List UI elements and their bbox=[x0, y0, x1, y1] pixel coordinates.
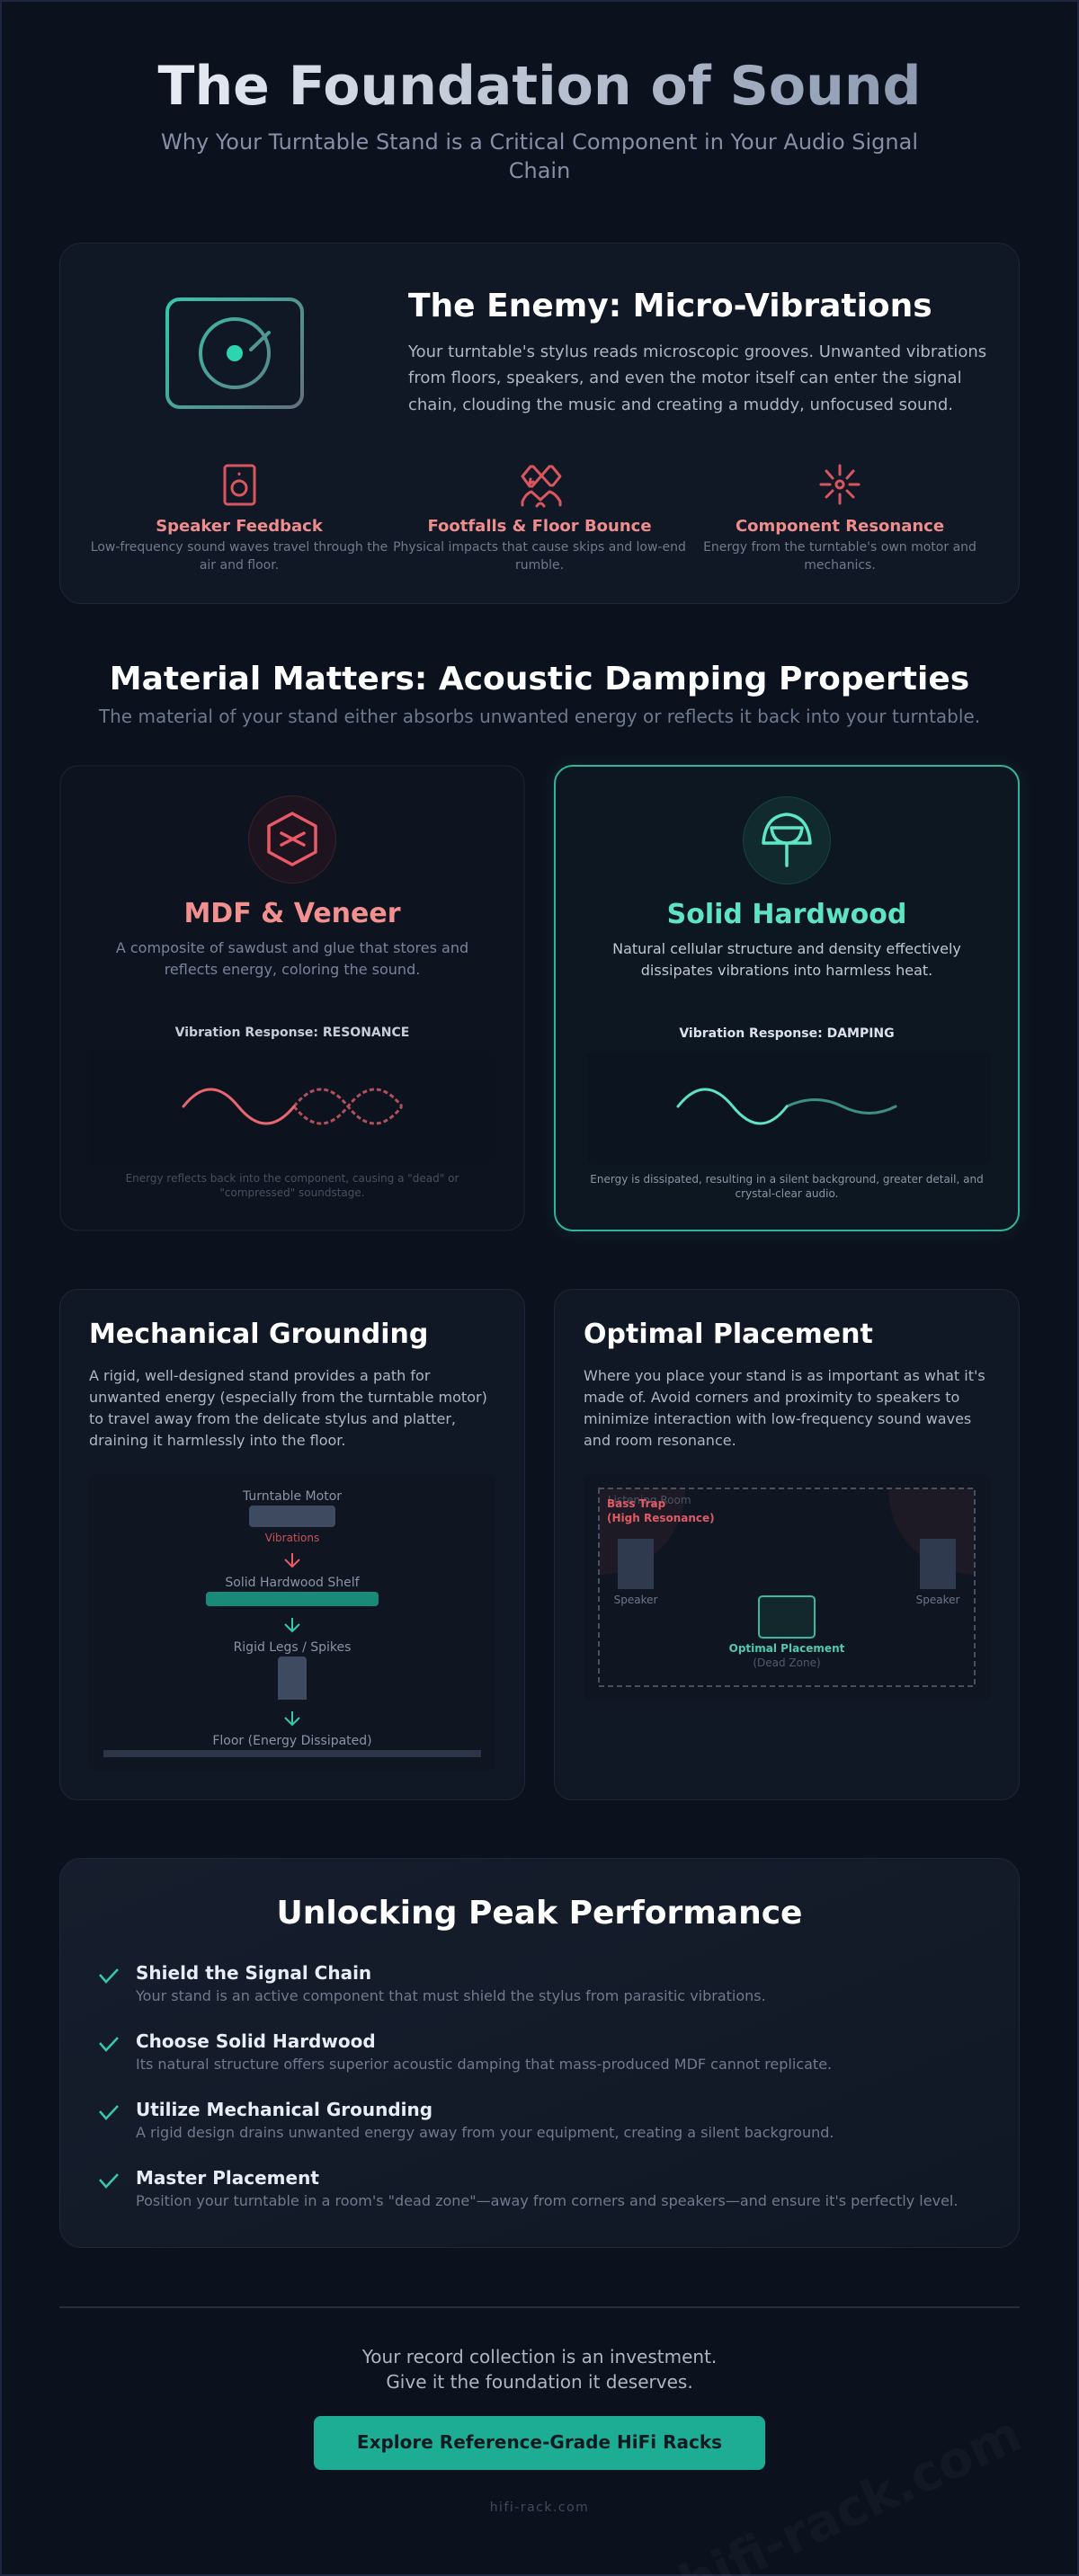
item: placement: Position your turntable in a room's "dead zone"—away from corners and speakers—and ensure it's perfectly level. bbox=[136, 2192, 958, 2209]
item: footfalls: Footfalls & Floor Bounce bbox=[427, 517, 652, 536]
heading: mechanical grounding: Mechanical Grounding bbox=[89, 1319, 428, 1350]
text: site url: hifi-rack.com bbox=[490, 2500, 589, 2515]
item: placement bbox=[100, 2167, 958, 2209]
item: placement: Master Placement bbox=[136, 2167, 319, 2189]
button: explore racks bbox=[314, 2416, 765, 2470]
item: hardwood: Its natural structure offers superior acoustic damping that mass-produced MDF cannot replicate. bbox=[136, 2056, 832, 2073]
heading: unlocking: Unlocking Peak Performance bbox=[277, 1895, 802, 1932]
text: grounding description: to travel away from the delicate stylus and platter, bbox=[89, 1410, 456, 1427]
label: listening room: Listening Room bbox=[608, 1494, 691, 1506]
label: legs: Rigid Legs / Spikes bbox=[234, 1640, 351, 1655]
item: hardwood: Choose Solid Hardwood bbox=[136, 2030, 376, 2052]
label: speaker left: Speaker bbox=[614, 1594, 657, 1606]
text: hardwood description: dissipates vibrations into harmless heat. bbox=[641, 962, 932, 979]
label: dead zone: (Dead Zone) bbox=[753, 1657, 821, 1669]
zones: bass traps bbox=[599, 1488, 975, 1575]
label: optimal placement: Optimal Placement bbox=[729, 1642, 845, 1655]
heading: hardwood: Solid Hardwood bbox=[667, 899, 906, 930]
icon: turntable bbox=[167, 299, 302, 407]
speaker right bbox=[920, 1539, 956, 1589]
caption: mdf: "compressed" soundstage. bbox=[219, 1186, 365, 1199]
caption: hardwood: Energy is dissipated, resulting in a silent background, greater detail, and bbox=[590, 1173, 984, 1186]
chart: resonance wave bbox=[88, 1051, 496, 1165]
label: turntable motor: Turntable Motor bbox=[242, 1489, 342, 1504]
text: enemy description: Your turntable's stylus reads microscopic grooves. Unwanted vibrations bbox=[407, 342, 986, 361]
text: call to action bbox=[361, 2346, 717, 2393]
item: footfalls: rumble. bbox=[515, 558, 564, 573]
block: motor bbox=[249, 1506, 335, 1527]
item: component resonance: Component Resonance bbox=[736, 517, 944, 536]
text: hardwood description bbox=[612, 940, 961, 979]
diagram: room layout bbox=[598, 1488, 976, 1687]
item: shield bbox=[100, 1962, 766, 2004]
item: footfalls bbox=[393, 517, 686, 573]
label: shelf: Solid Hardwood Shelf bbox=[225, 1576, 361, 1590]
text: mdf description bbox=[116, 939, 468, 978]
item: grounding: A rigid design drains unwanted energy away from your equipment, creating a silent background. bbox=[136, 2124, 834, 2141]
label: floor: Floor (Energy Dissipated) bbox=[212, 1734, 372, 1748]
item: speaker feedback: Low-frequency sound waves travel through the bbox=[91, 540, 388, 555]
block: floor bbox=[103, 1750, 481, 1757]
item: grounding bbox=[100, 2099, 834, 2141]
chart: damping wave bbox=[587, 1051, 990, 1165]
title: The Foundation of Sound bbox=[158, 55, 921, 118]
label: bass trap: (High Resonance) bbox=[607, 1512, 715, 1524]
panel: unlocking peak performance bbox=[59, 1859, 1020, 2247]
heading: the enemy: The Enemy: Micro-Vibrations bbox=[408, 288, 932, 324]
heading: mdf: MDF & Veneer bbox=[183, 898, 401, 929]
label: speaker right: Speaker bbox=[916, 1594, 959, 1606]
turntable position bbox=[759, 1596, 815, 1638]
item: shield: Shield the Signal Chain bbox=[136, 1962, 371, 1984]
icon: footfalls bbox=[522, 466, 560, 506]
arrow: shelf to legs bbox=[285, 1618, 299, 1631]
item: speaker feedback: Speaker Feedback bbox=[156, 517, 324, 536]
panel: optimal placement bbox=[554, 1289, 1020, 1800]
panel: the enemy micro-vibrations bbox=[59, 243, 1020, 604]
caption: hardwood bbox=[590, 1173, 984, 1200]
icon: resonance bbox=[821, 466, 859, 503]
item: footfalls: Physical impacts that cause skips and low-end bbox=[393, 540, 686, 555]
caption: hardwood: crystal-clear audio. bbox=[736, 1187, 838, 1200]
text: grounding description: unwanted energy (especially from the turntable motor) bbox=[89, 1389, 487, 1406]
text: placement description: minimize interaction with low-frequency sound waves bbox=[584, 1410, 971, 1427]
item: speaker feedback bbox=[91, 517, 388, 573]
subtitle: Why Your Turntable Stand is a Critical Component in Your Audio Signal bbox=[161, 129, 918, 155]
label: resonance: Vibration Response: RESONANCE bbox=[175, 1026, 409, 1040]
label: bass trap bbox=[607, 1497, 715, 1524]
panel: mdf and veneer bbox=[60, 766, 524, 1230]
arrow: legs to floor bbox=[285, 1711, 299, 1725]
text: placement description: Where you place your stand is as important as what it's bbox=[584, 1367, 985, 1384]
button: explore racks: Explore Reference-Grade HiFi Racks bbox=[357, 2431, 722, 2453]
item: hardwood bbox=[100, 2030, 832, 2073]
panel: solid hardwood bbox=[555, 766, 1019, 1230]
subtitle: Chain bbox=[509, 158, 570, 183]
heading: optimal placement: Optimal Placement bbox=[584, 1319, 873, 1350]
text: enemy description: from floors, speakers, and even the motor itself can enter the signal bbox=[408, 369, 962, 387]
block: shelf bbox=[206, 1592, 379, 1606]
label: vibrations: Vibrations bbox=[265, 1532, 319, 1544]
text: placement description bbox=[584, 1367, 985, 1449]
icon: hardwood bbox=[743, 796, 831, 884]
text: grounding description: draining it harmlessly into the floor. bbox=[89, 1432, 345, 1449]
speaker left bbox=[618, 1539, 654, 1589]
item: component resonance: mechanics. bbox=[804, 558, 876, 573]
item: component resonance bbox=[703, 517, 976, 573]
subtitle bbox=[161, 129, 918, 183]
text: call to action: Your record collection is an investment. bbox=[361, 2346, 717, 2367]
item: speaker feedback: air and floor. bbox=[200, 558, 279, 573]
item: grounding: Utilize Mechanical Grounding bbox=[136, 2099, 432, 2120]
text: material subtitle: The material of your stand either absorbs unwanted energy or reflects it back into your turntable. bbox=[98, 706, 980, 727]
label: damping: Vibration Response: DAMPING bbox=[679, 1026, 895, 1041]
heading: material matters: Material Matters: Acoustic Damping Properties bbox=[110, 661, 969, 697]
item: shield: Your stand is an active component that must shield the stylus from parasitic vibrations. bbox=[135, 1987, 766, 2004]
text: mdf description: A composite of sawdust and glue that stores and bbox=[116, 939, 468, 956]
room outline bbox=[599, 1488, 975, 1686]
text: grounding description: A rigid, well-designed stand provides a path for bbox=[89, 1367, 431, 1384]
text: call to action: Give it the foundation it deserves. bbox=[386, 2371, 693, 2393]
text: enemy description: chain, clouding the music and creating a muddy, unfocused sound. bbox=[408, 395, 953, 414]
caption: mdf: Energy reflects back into the component, causing a "dead" or bbox=[126, 1172, 459, 1185]
text: placement description: made of. Avoid corners and proximity to speakers to bbox=[584, 1389, 959, 1406]
block: leg bbox=[278, 1657, 307, 1700]
text: grounding description bbox=[89, 1367, 487, 1449]
arrow: vibrations bbox=[285, 1553, 299, 1567]
text: enemy description bbox=[407, 342, 986, 414]
panel: mechanical grounding bbox=[59, 1289, 525, 1799]
icon: speaker bbox=[225, 466, 254, 504]
text: hardwood description: Natural cellular structure and density effectively bbox=[612, 940, 961, 957]
diagram: energy path bbox=[89, 1474, 495, 1771]
item: component resonance: Energy from the turntable's own motor and bbox=[703, 540, 976, 555]
icon: mdf hexagon bbox=[248, 796, 336, 883]
label: bass trap: Bass Trap bbox=[607, 1497, 666, 1510]
text: mdf description: reflects energy, coloring the sound. bbox=[165, 961, 420, 978]
text: placement description: and room resonance. bbox=[584, 1432, 736, 1449]
caption: mdf bbox=[126, 1172, 459, 1199]
